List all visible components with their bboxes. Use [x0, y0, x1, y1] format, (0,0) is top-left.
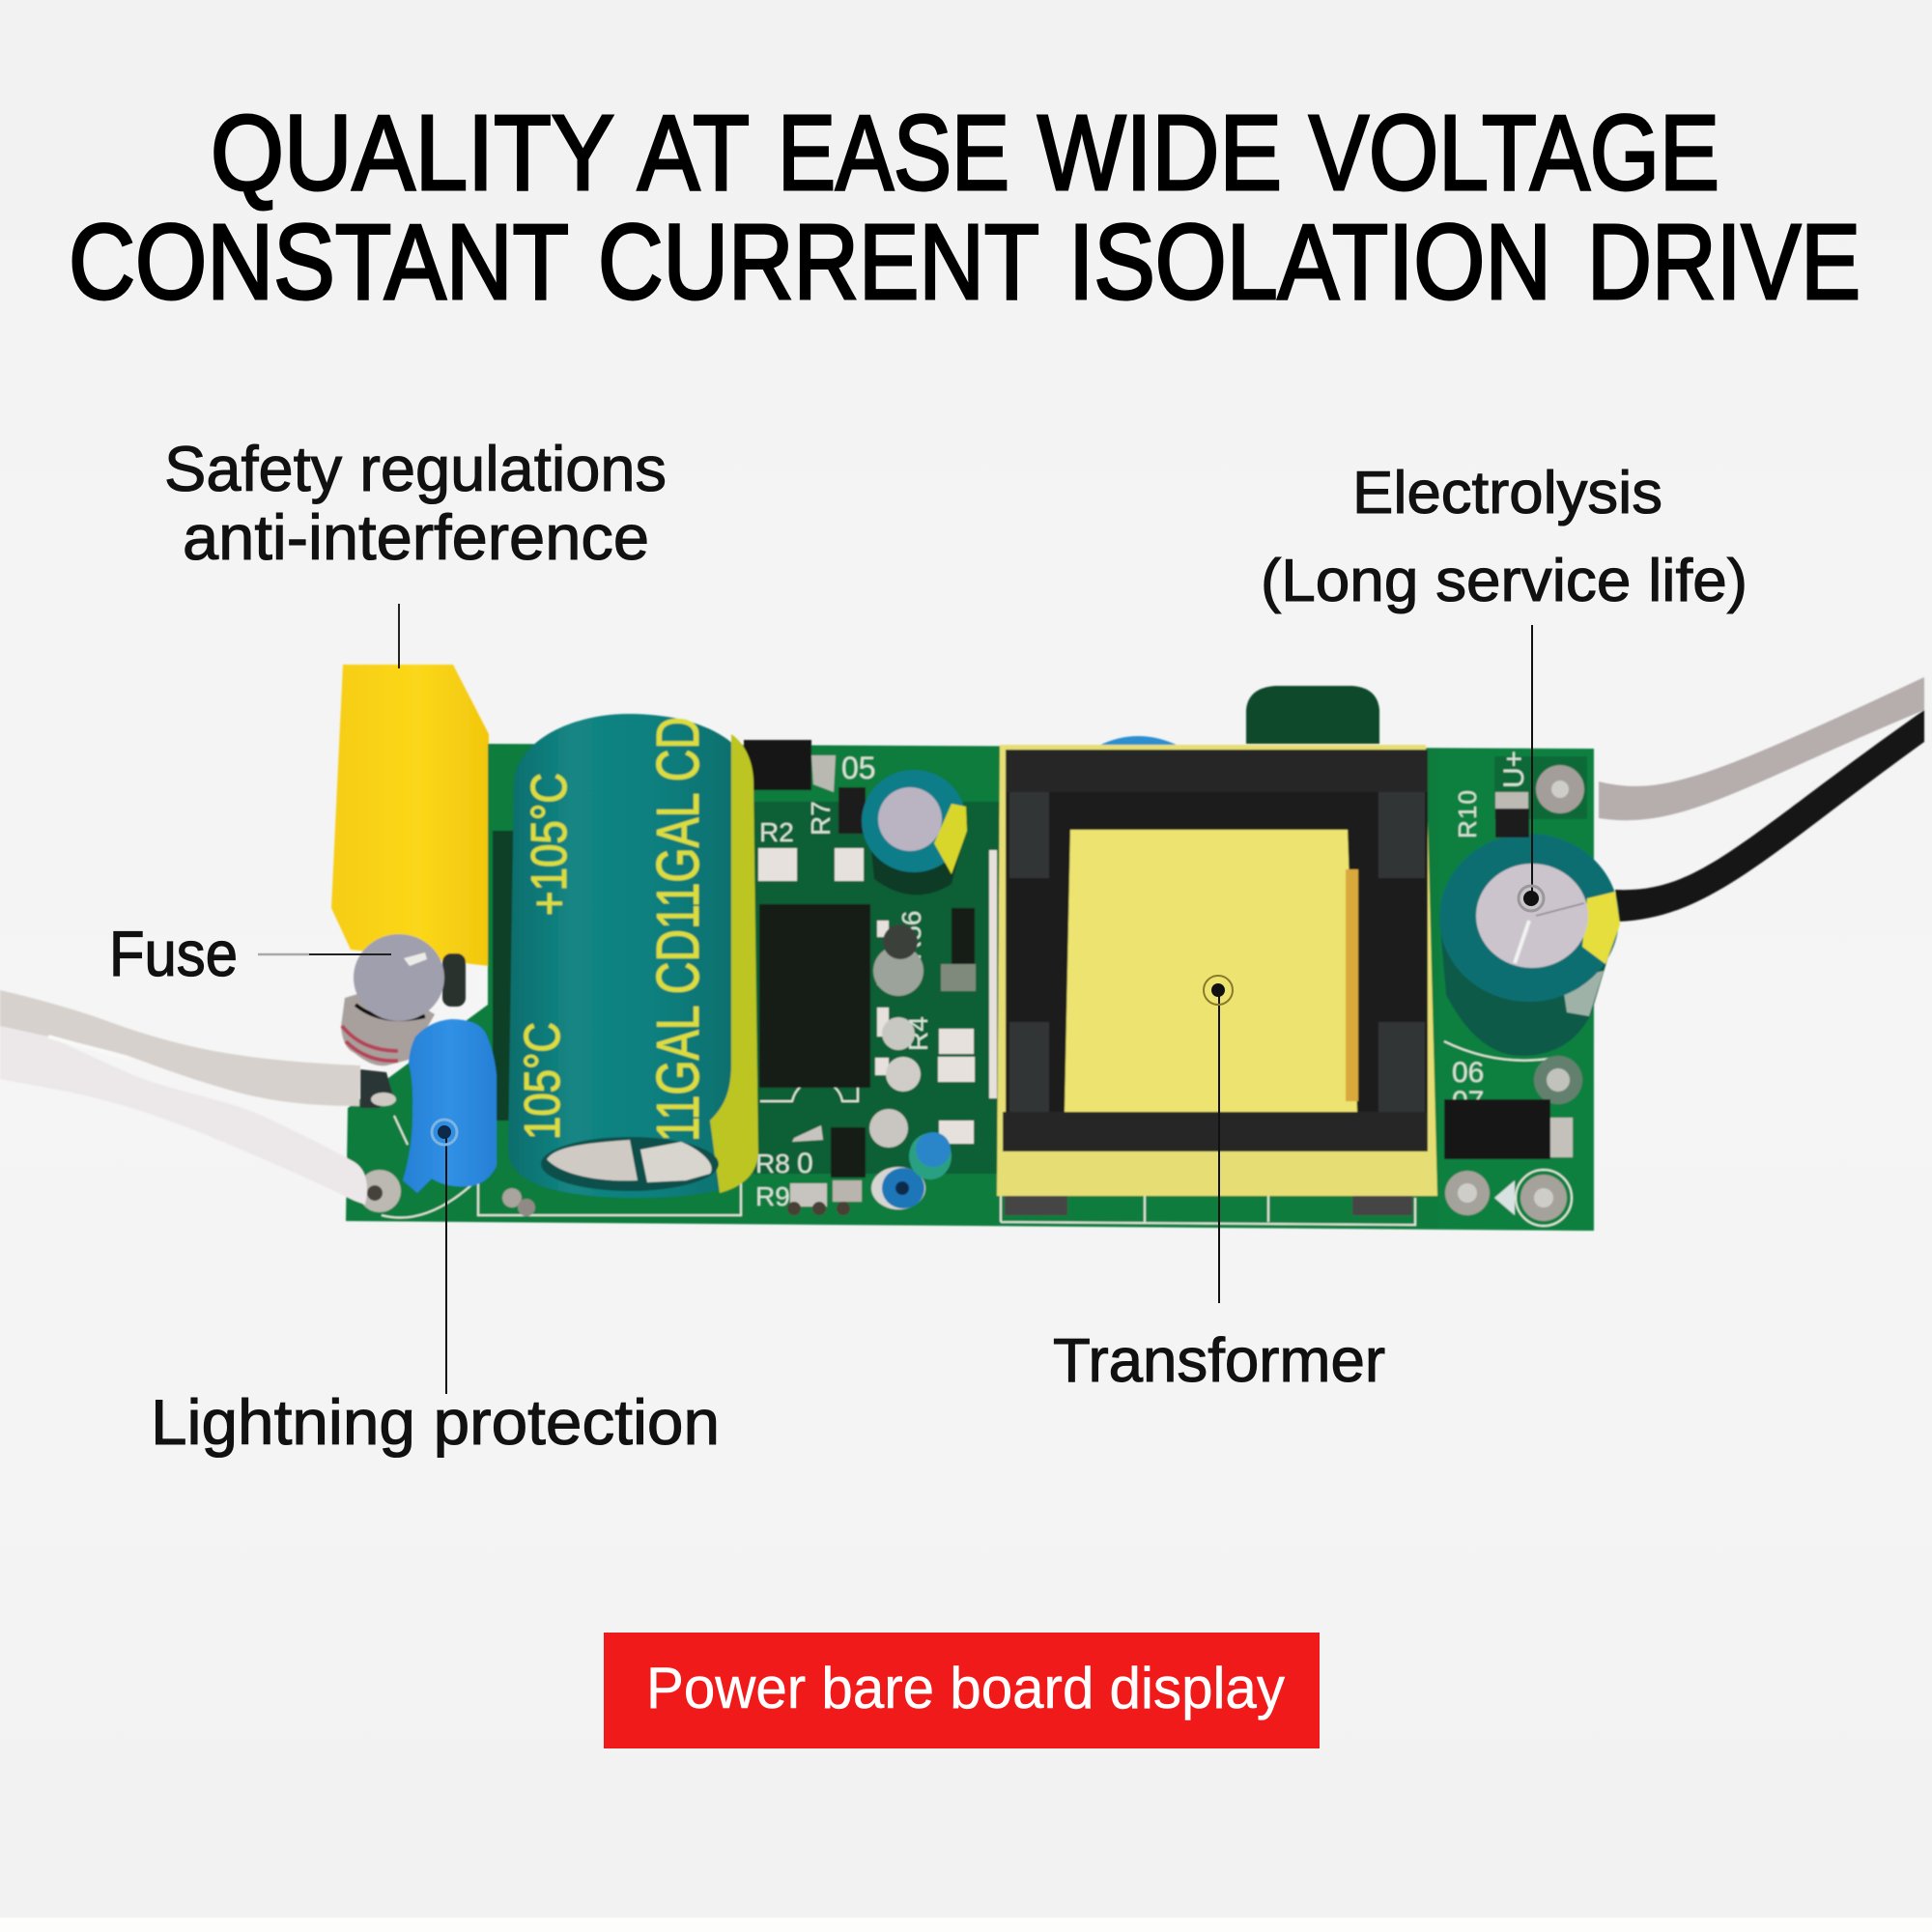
electrolysis marker	[1519, 886, 1544, 911]
capacitor terminal	[541, 1137, 719, 1191]
circuit board	[346, 744, 1594, 1231]
electrolysis label: Electrolysis	[1352, 460, 1662, 526]
silkscreen labels: 07	[1452, 1086, 1484, 1118]
lightning marker	[432, 1120, 457, 1145]
capacitor printing	[515, 717, 712, 1142]
silkscreen outlines	[382, 1041, 1555, 1225]
title: QUALITY	[211, 94, 614, 213]
silkscreen labels: R4	[903, 1016, 933, 1051]
fuse label: Fuse	[109, 918, 238, 989]
ferrite core	[1006, 750, 1428, 1151]
lightning protection label: Lightning protection	[151, 1386, 720, 1458]
title: WIDE	[1037, 94, 1282, 213]
title: DRIVE	[1587, 203, 1861, 322]
output cap body	[1439, 918, 1620, 1056]
yellow safety capacitor	[331, 665, 489, 966]
control IC U1	[759, 904, 870, 1088]
small blue resistors	[871, 1132, 952, 1209]
fuse leader line	[258, 953, 391, 955]
safety label: anti-interference	[183, 501, 649, 573]
title: EASE	[778, 94, 1009, 213]
silkscreen labels: R2	[759, 817, 794, 847]
red banner	[604, 1633, 1320, 1748]
coil	[1065, 830, 1357, 1112]
fuse cap	[354, 934, 444, 1021]
blue lightning-protection varistor	[403, 1019, 497, 1193]
title: CONSTANT	[69, 203, 569, 322]
left input wires	[0, 990, 401, 1212]
output cap terminal	[1476, 864, 1588, 968]
callout: electrolysis	[1261, 460, 1747, 911]
right output wires	[1599, 677, 1924, 922]
callout: safety regulations	[164, 433, 667, 668]
transformer marker	[1204, 976, 1233, 1005]
silkscreen labels: 0	[797, 1148, 813, 1179]
silkscreen labels: R9	[755, 1181, 790, 1211]
silkscreen labels: R10	[1453, 790, 1482, 838]
output electrolytic capacitor	[1439, 834, 1620, 1056]
small SMD parts	[787, 787, 976, 1215]
transformer	[997, 745, 1437, 1215]
capacitor printing: +105°C	[522, 773, 578, 916]
wire end solder	[360, 1069, 393, 1108]
output cap stripe	[1582, 892, 1620, 964]
silkscreen labels: 06	[1452, 1057, 1484, 1089]
fuse rear body	[442, 953, 466, 1007]
upper grey wire	[0, 990, 360, 1106]
transformer pins	[1005, 1196, 1067, 1215]
blue part behind transformer	[1098, 736, 1179, 746]
banner text: Power bare board display	[646, 1656, 1285, 1720]
silkscreen labels: R8	[755, 1149, 790, 1179]
transformer label: Transformer	[1053, 1325, 1385, 1395]
output solder pads	[1445, 765, 1584, 1226]
solder joints by capacitor	[502, 1188, 535, 1216]
silkscreen labels	[755, 751, 1530, 1211]
electrolysis label: (Long service life)	[1261, 548, 1747, 614]
capacitor printing: 105°C	[515, 1022, 571, 1140]
electrolysis leader line	[1531, 625, 1533, 898]
safety label	[164, 433, 667, 573]
white pads	[758, 848, 997, 1144]
small black part	[744, 740, 811, 790]
yellow polarity stripe	[710, 734, 758, 1193]
silkscreen labels: 05	[841, 751, 876, 785]
silkscreen labels: R7	[806, 801, 836, 836]
title: ISOLATION	[1068, 203, 1551, 322]
safety leader line	[398, 604, 400, 668]
output cap face	[1439, 834, 1619, 1002]
small electrolytic capacitor	[862, 770, 968, 895]
safety label: Safety regulations	[164, 433, 667, 504]
fuse	[341, 934, 466, 1065]
callout: transformer	[1053, 976, 1385, 1395]
title: VOLTAGE	[1309, 94, 1719, 213]
output rectifier	[1444, 1099, 1573, 1159]
small solder pad	[811, 755, 836, 792]
transformer leader line	[1218, 991, 1220, 1303]
main electrolytic capacitor	[508, 714, 758, 1198]
lightning leader line	[445, 1132, 447, 1394]
title: CURRENT	[598, 203, 1039, 322]
photo: LED driver circuit board	[0, 665, 1924, 1231]
callout: lightning protection	[151, 1120, 720, 1458]
green film capacitor	[1246, 686, 1379, 744]
electrolysis label	[1261, 460, 1747, 614]
bobbin	[997, 745, 1437, 1196]
title: AT	[638, 94, 750, 213]
callout: fuse	[109, 918, 391, 989]
lower white wire	[0, 1024, 367, 1205]
silkscreen labels: R56	[896, 911, 926, 960]
capacitor printing: 11GAL CD11GAL CD	[645, 717, 712, 1142]
title	[69, 94, 1861, 322]
bottom white strip	[0, 1918, 1932, 1932]
silkscreen labels: U+	[1498, 751, 1530, 788]
